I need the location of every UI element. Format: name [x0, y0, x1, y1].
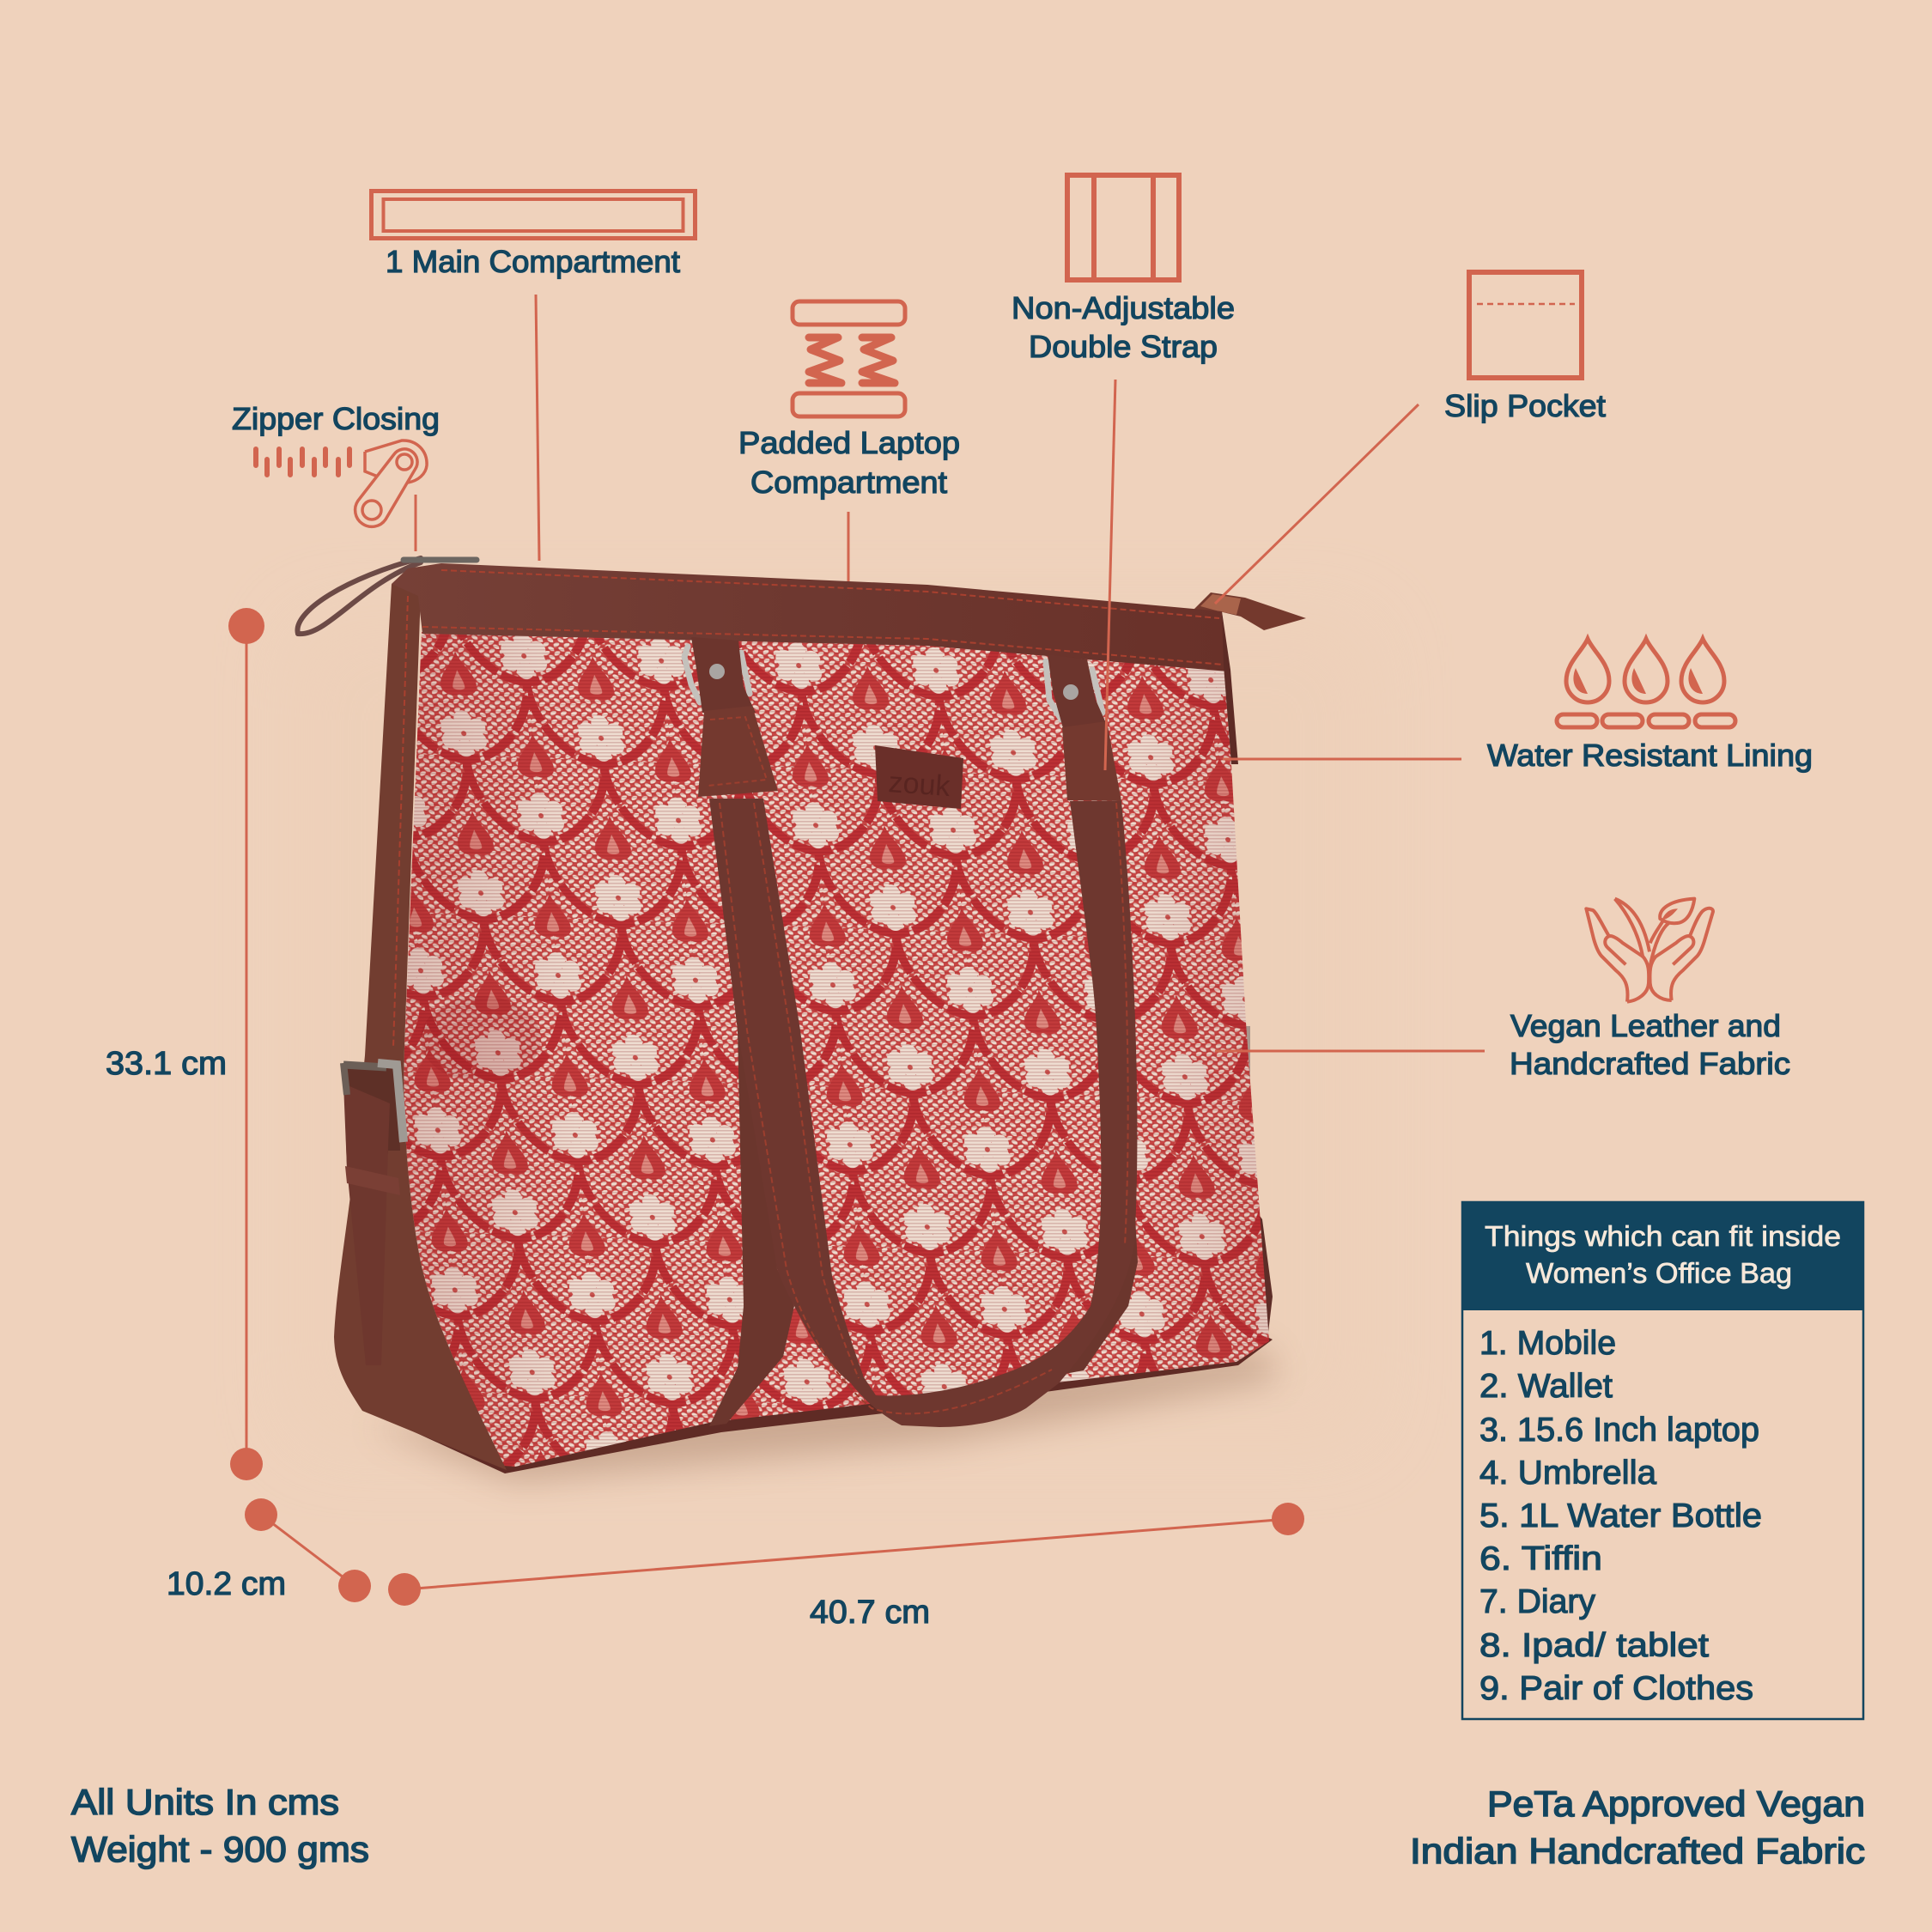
base strip — [362, 1322, 1273, 1473]
top leather band — [392, 563, 1228, 671]
height dimension — [106, 608, 264, 1480]
right strap top hardware — [1046, 654, 1121, 801]
list of items: 1. Mobile — [1479, 1325, 1616, 1362]
left buckle strap — [343, 1063, 404, 1365]
fabric panel — [404, 632, 1269, 1467]
footer left: units and weight — [71, 1782, 369, 1869]
label: slip pocket: Slip Pocket — [1444, 388, 1606, 423]
icon: slip pocket — [1469, 272, 1582, 378]
lower strap attachment strips — [709, 1030, 1138, 1426]
label: padded laptop compartment: Padded Laptop — [738, 425, 960, 460]
zip tag right — [1194, 592, 1306, 630]
logo patch — [875, 745, 963, 809]
list of items: 6. Tiffin — [1479, 1540, 1602, 1577]
ground shadow — [292, 618, 1374, 1481]
footer left: units and weight: All Units In cms — [71, 1782, 339, 1822]
left strap top hardware — [684, 637, 778, 797]
list of items: 4. Umbrella — [1479, 1455, 1656, 1492]
right gusset — [1243, 1194, 1273, 1340]
label: double strap — [1012, 290, 1235, 364]
right side buckle — [1242, 1026, 1250, 1084]
footer right: peta approved: Indian Handcrafted Fabric — [1410, 1831, 1865, 1871]
panel: things which can fit inside — [1461, 1201, 1864, 1719]
list of items: 2. Wallet — [1479, 1368, 1613, 1405]
width dimension: 40.7 cm — [810, 1595, 930, 1631]
footer left: units and weight: Weight - 900 gms — [71, 1829, 369, 1869]
label: padded laptop compartment: Compartment — [750, 465, 947, 500]
icon: padded laptop compartment — [793, 301, 905, 416]
label: padded laptop compartment — [738, 425, 960, 500]
label: vegan leather and handcrafted fabric: Vegan Leather and — [1510, 1008, 1781, 1043]
icon: hands with leaf — [1586, 899, 1713, 1002]
icon: double strap — [1067, 175, 1179, 280]
right edge trim — [1222, 611, 1238, 764]
list of items: 5. 1L Water Bottle — [1479, 1498, 1762, 1534]
list of items — [1479, 1325, 1762, 1707]
depth dimension: 10.2 cm — [167, 1566, 286, 1602]
panel header: Things which can fit inside — [1485, 1220, 1841, 1252]
footer right: peta approved — [1410, 1783, 1865, 1871]
icon: water resistant — [1557, 639, 1735, 727]
list of items: 9. Pair of Clothes — [1479, 1670, 1753, 1707]
icon: zipper — [256, 440, 427, 526]
leader lines — [416, 295, 1485, 1051]
height dimension: 33.1 cm — [106, 1046, 227, 1082]
label: double strap: Non-Adjustable — [1012, 290, 1235, 325]
label: main compartment: 1 Main Compartment — [386, 244, 680, 279]
shoulder strap loop — [709, 799, 1137, 1427]
depth dimension — [167, 1498, 371, 1602]
panel header — [1461, 1201, 1864, 1310]
list of items: 3. 15.6 Inch laptop — [1479, 1412, 1759, 1449]
panel header: Women’s Office Bag — [1526, 1257, 1792, 1289]
label: vegan leather and handcrafted fabric — [1510, 1008, 1790, 1081]
logo patch: zouk — [887, 766, 952, 803]
list of items: 7. Diary — [1479, 1583, 1595, 1620]
label: vegan leather and handcrafted fabric: Handcrafted Fabric — [1510, 1046, 1790, 1081]
label: zipper closing: Zipper Closing — [232, 401, 440, 436]
zipper cord — [297, 558, 477, 634]
width dimension — [388, 1503, 1304, 1631]
label: double strap: Double Strap — [1029, 329, 1218, 364]
left gusset leather — [334, 584, 507, 1470]
product bag photo — [292, 558, 1374, 1481]
list of items: 8. Ipad/ tablet — [1479, 1627, 1709, 1664]
footer right: peta approved: PeTa Approved Vegan — [1487, 1783, 1865, 1824]
icon: main compartment — [371, 191, 696, 239]
label: water resistant lining: Water Resistant Lining — [1487, 738, 1813, 773]
